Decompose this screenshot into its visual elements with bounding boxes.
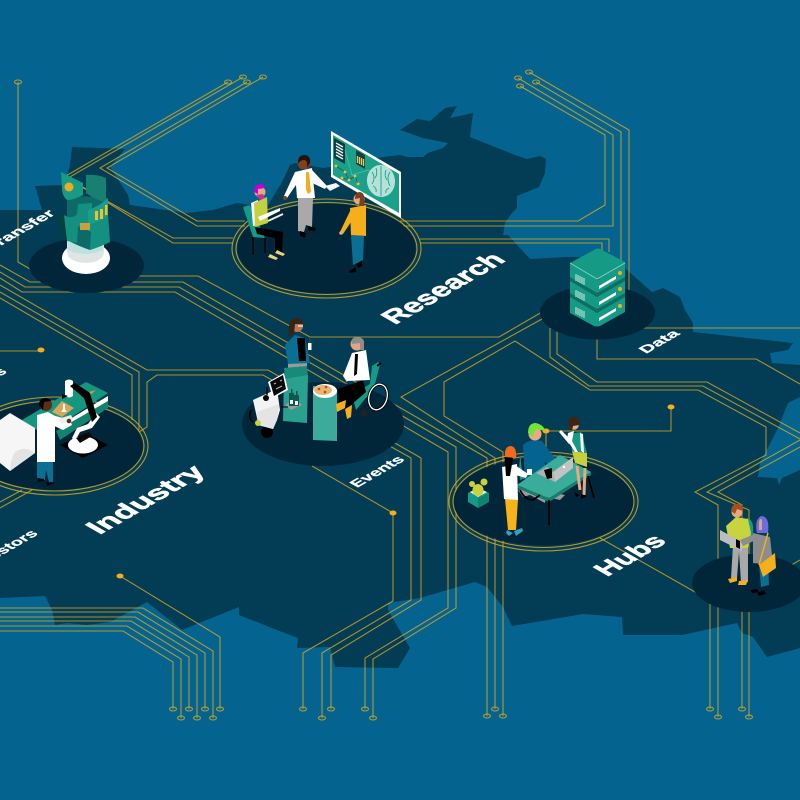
woman with hijab and bag — [740, 516, 776, 596]
cactus in box — [468, 478, 489, 508]
platform: hubs disc and rings — [449, 452, 638, 551]
white machine — [0, 413, 35, 471]
map: land silhouette — [0, 106, 800, 668]
stand two with pizza — [313, 384, 337, 441]
platform: research disc and rings — [232, 199, 421, 298]
platform: industry disc and rings — [0, 397, 148, 495]
robot with screen — [250, 373, 288, 438]
figure group: hubs scene — [468, 417, 594, 536]
seated man — [243, 184, 285, 260]
robot arm — [60, 380, 108, 458]
scientist in lab coat — [37, 398, 73, 486]
stand one — [283, 366, 308, 423]
research screen with brain — [331, 131, 401, 218]
platform: events disc — [242, 382, 404, 466]
icon: transfer tower — [58, 172, 110, 274]
figure group: research scene — [243, 131, 401, 273]
man with backpack and laptop — [720, 504, 753, 585]
platform: travellers disc — [692, 554, 800, 612]
table with laptop — [517, 455, 594, 525]
man in wheelchair — [336, 337, 390, 419]
label: Data: Data — [636, 327, 685, 356]
figure group: industry scene — [0, 380, 108, 486]
figure group: events scene — [250, 318, 390, 441]
platform: transfer disc — [29, 238, 144, 293]
icon: data server stack — [570, 248, 625, 326]
woman with orange hat — [502, 446, 532, 536]
standing woman in green dress — [559, 417, 587, 499]
map: inland water — [758, 397, 800, 485]
label: Hubs: Hubs — [586, 530, 673, 580]
figure group: travellers — [720, 504, 776, 596]
platform: data disc — [540, 286, 655, 340]
pad on hubs line — [542, 428, 550, 434]
label: Industry: Industry — [79, 461, 212, 538]
label: Research: Research — [374, 248, 512, 328]
standing woman in yellow sweater — [339, 192, 366, 273]
seated man with green hair — [518, 423, 565, 503]
label: Events: Events — [347, 454, 409, 490]
bottles on tray — [285, 389, 302, 410]
circuit pads — [14, 70, 752, 720]
lab table — [22, 382, 108, 440]
woman at stand — [285, 318, 312, 369]
standing man with tablet — [283, 155, 340, 238]
